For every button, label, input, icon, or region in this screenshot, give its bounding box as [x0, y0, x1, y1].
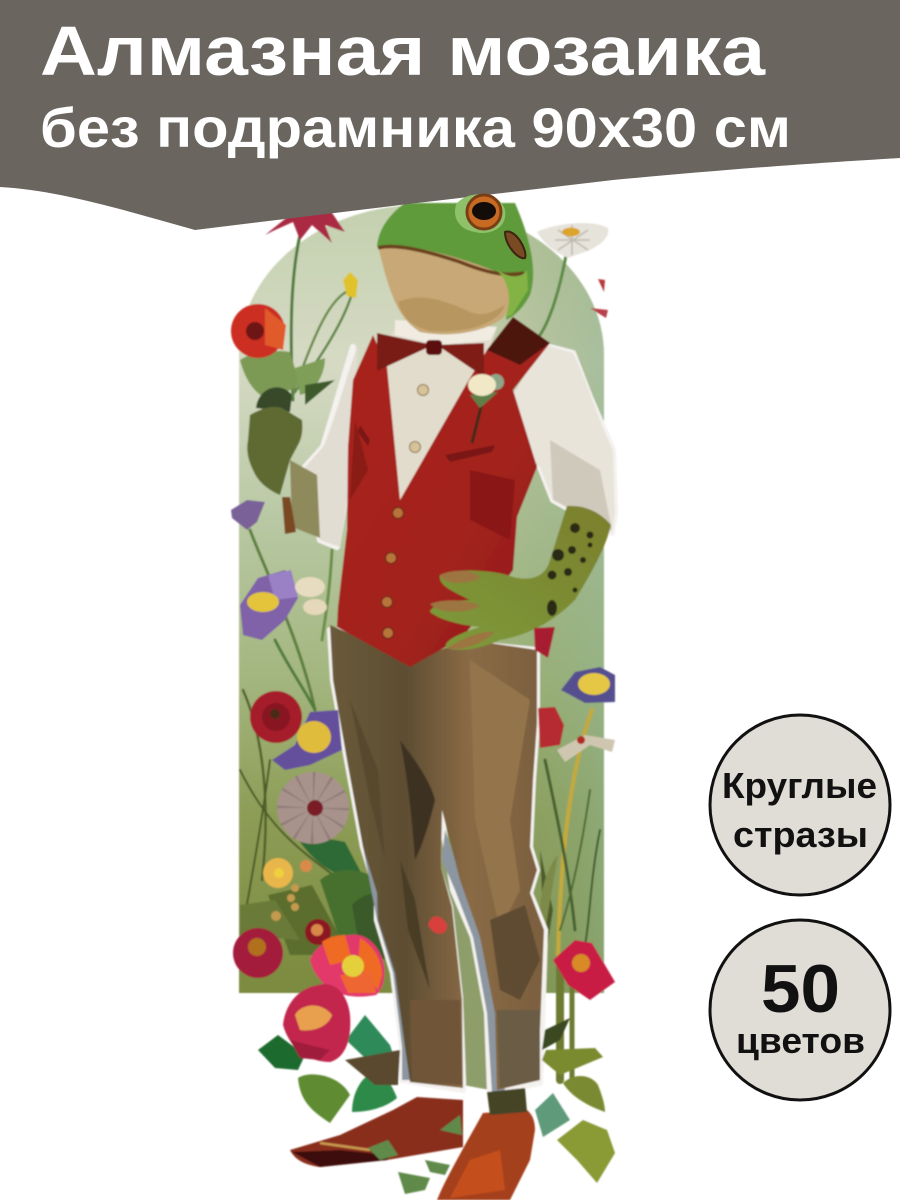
header banner — [0, 0, 900, 230]
flower: red gerbera — [231, 304, 286, 358]
badge: round rhinestones: Круглые — [722, 765, 877, 806]
badge: 50 colours: цветов — [736, 1020, 865, 1061]
badge: round rhinestones: стразы — [733, 814, 868, 855]
boutonniere — [468, 374, 504, 443]
flower: right red — [553, 940, 615, 1000]
leaves below the panel — [258, 1015, 615, 1183]
title: Алмазная мозаика — [40, 12, 766, 90]
frog illustration — [231, 203, 615, 1200]
flower: red rose — [250, 691, 302, 743]
waistcoat and shirt buttons — [382, 384, 428, 638]
cleaver — [282, 460, 320, 538]
small leaves over the shoes — [368, 1115, 462, 1194]
frog mouth line — [378, 247, 524, 274]
frog jaw highlight — [495, 268, 528, 318]
figure white outline — [305, 347, 615, 1093]
flower: small violet — [231, 500, 265, 530]
flower: cream buds — [295, 577, 327, 615]
gap between the legs — [438, 830, 490, 1090]
badge: 50 colours — [710, 920, 890, 1100]
falling petals — [428, 279, 608, 934]
flower: violet with yellow centre — [272, 710, 342, 770]
bow tie — [377, 333, 484, 377]
background leaves — [240, 351, 558, 960]
frog throat shading — [398, 297, 505, 331]
frog right arm with spots — [430, 506, 611, 650]
pale-blue trouser edge — [347, 750, 505, 1093]
frog left hand — [247, 407, 302, 495]
shirt — [305, 320, 615, 547]
flower: right violet — [561, 667, 615, 703]
frog head — [377, 203, 533, 320]
flower: yellow bud — [343, 272, 358, 298]
badge: 50 colours: 50 — [761, 951, 840, 1027]
flower: yellow — [263, 858, 312, 921]
flower: large violet — [240, 570, 298, 640]
flower: white daisy — [537, 223, 608, 258]
flower: orange red — [310, 935, 385, 997]
flower: crimson top — [265, 210, 345, 243]
trousers — [330, 625, 544, 1090]
waistcoat — [337, 317, 550, 667]
flower: bottom left crimson — [233, 919, 331, 978]
stems behind the figure — [240, 235, 600, 1080]
frog throat — [379, 238, 514, 334]
flower: grey pink daisy — [277, 772, 349, 844]
left shoe — [290, 1097, 463, 1167]
subtitle: без подрамника 90х30 см — [40, 96, 791, 159]
flower: right red and pale daisy — [538, 707, 615, 762]
right shoe — [437, 1088, 535, 1200]
background arch panel — [239, 205, 604, 993]
flower: pink rose — [283, 984, 350, 1062]
badge: round rhinestones — [710, 715, 890, 895]
frog eye over the banner — [455, 194, 525, 258]
